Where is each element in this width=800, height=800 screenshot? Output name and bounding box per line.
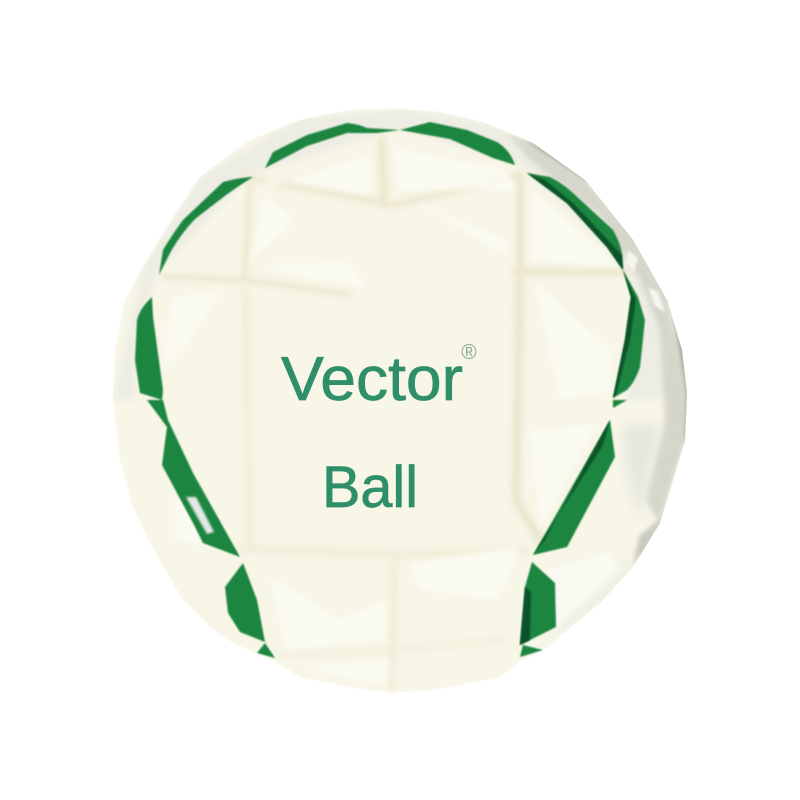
registered mark: ®: [461, 341, 477, 364]
facets: [165, 140, 625, 690]
ball label: Vector: Vector: [281, 345, 463, 414]
ball label: Ball: Ball: [322, 455, 418, 520]
ball body: [113, 109, 700, 692]
green stripe: [135, 122, 645, 658]
bright highlights: [165, 148, 620, 685]
stripe highlight: [186, 497, 214, 534]
stripe dark shading: [520, 173, 636, 645]
illustration: Vector Ball: [113, 108, 688, 694]
rim shading: [118, 114, 687, 596]
cream ridges: [165, 140, 625, 690]
